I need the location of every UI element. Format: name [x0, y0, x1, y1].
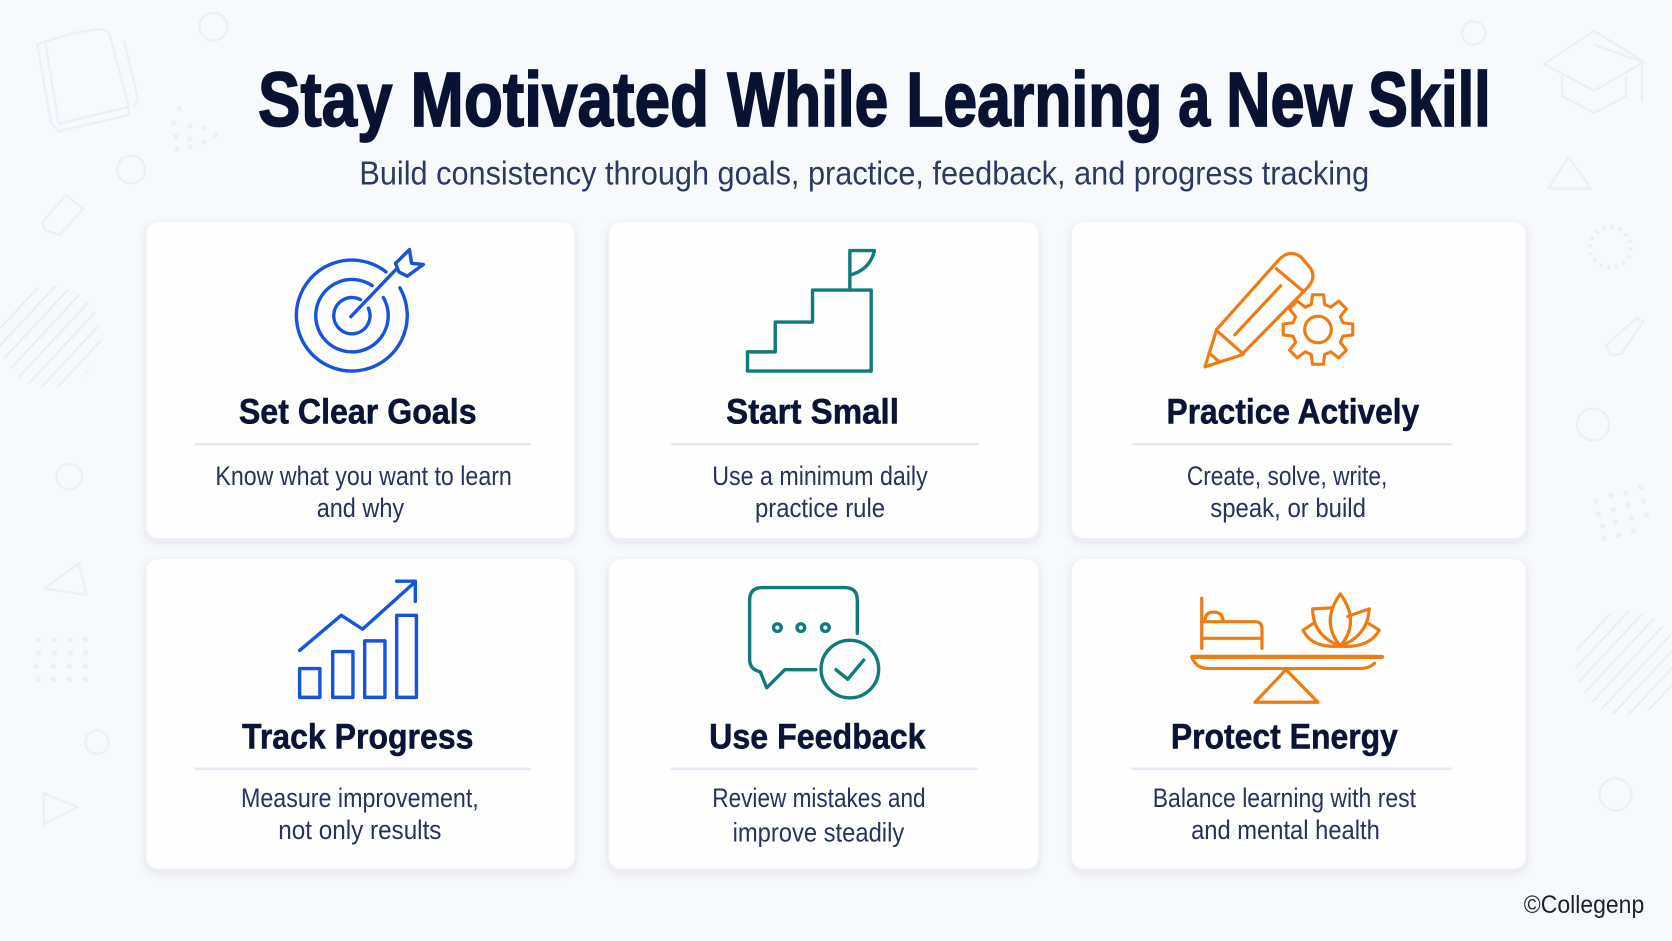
description: practice rule — [755, 493, 885, 523]
description: Create, solve, write, — [1187, 461, 1387, 491]
title: Stay — [258, 58, 393, 143]
title: a — [1178, 58, 1211, 143]
description: and mental health — [1191, 815, 1380, 845]
heading: Protect Energy — [1171, 718, 1398, 757]
title: Skill — [1368, 58, 1491, 143]
description: Balance learning with rest — [1153, 783, 1417, 813]
title: Learning — [906, 58, 1162, 143]
decoration: triangles — [44, 157, 1591, 824]
panel: Track Progress — [146, 559, 575, 869]
description: not only results — [278, 815, 441, 845]
heading: Track Progress — [242, 718, 473, 757]
panel: Set Clear Goals — [146, 222, 575, 538]
title: While — [727, 58, 888, 143]
description: and why — [317, 493, 405, 523]
icon: pencil and gear — [1205, 253, 1353, 367]
decoration: hatch circle right — [1575, 611, 1672, 716]
panel: Use Feedback — [609, 559, 1039, 869]
decoration: hatch circle left — [0, 286, 101, 388]
icon: rising bar chart — [300, 581, 416, 697]
subtitle: Build consistency through goals, practice, feedback, and progress tracking — [359, 155, 1369, 192]
heading: Set Clear Goals — [239, 392, 477, 431]
panel: Practice Actively — [1072, 222, 1526, 538]
decoration: dots — [33, 106, 1649, 682]
decoration: dashed circle — [1590, 227, 1630, 268]
heading: Practice Actively — [1167, 392, 1420, 431]
description: speak, or build — [1210, 493, 1366, 523]
description: Know what you want to learn — [215, 461, 512, 491]
decoration: graduation cap — [1544, 31, 1644, 113]
description: improve steadily — [733, 817, 905, 847]
description: Measure improvement, — [241, 783, 479, 813]
panel: Start Small — [609, 222, 1039, 538]
icon: stairs with flag — [747, 251, 874, 371]
decoration: eraser and pencil — [43, 195, 1643, 355]
icon: target with arrow — [296, 250, 423, 371]
copyright credit: ©Collegenp — [1524, 892, 1644, 919]
decoration: circles — [57, 13, 1631, 810]
description: Review mistakes and — [712, 783, 926, 813]
heading: Use Feedback — [709, 718, 926, 757]
panel: Protect Energy — [1072, 559, 1526, 869]
icon: bed and lotus on a balance — [1192, 594, 1382, 702]
decoration: book — [37, 29, 138, 131]
title: New — [1226, 58, 1352, 143]
title: Motivated — [411, 58, 709, 143]
description: Use a minimum daily — [712, 461, 928, 491]
heading: Start Small — [726, 392, 899, 431]
icon: chat bubble with check — [750, 588, 879, 698]
